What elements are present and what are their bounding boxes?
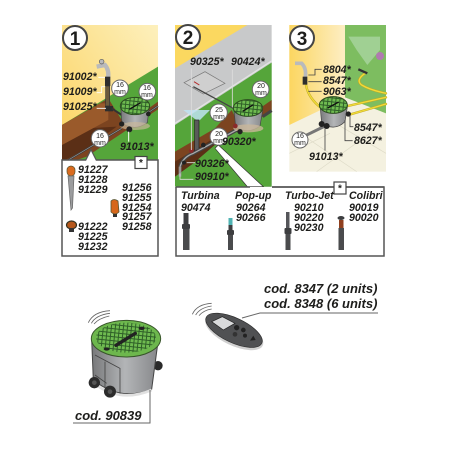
panel 3 codes: 9063* [323,86,352,98]
panel 3: tap and hose installation [289,25,386,172]
accessory codes: 91232 [78,241,108,253]
icon: Turbina sprinkler [182,213,190,250]
leader lines [308,69,353,151]
sprinkler names and codes: 90220 [294,212,324,224]
mm labels: mm [213,114,225,121]
mm labels: mm [255,90,267,97]
accessory codes [78,164,153,253]
mm labels: mm [213,138,225,145]
number badge 1: 1 [70,29,81,50]
icon: wireless signal [192,303,212,316]
panel 1 codes: 91025* [63,101,97,113]
panel 3 illustration [289,25,386,172]
tap [97,65,108,78]
panel 2 illustration [175,25,272,188]
panel 1 accessories box [62,150,158,256]
sprinkler names and codes: Turbina [181,190,220,202]
valve box [121,106,149,127]
accessory codes: 91256 [122,182,152,194]
remote illustration [192,303,268,358]
accessory codes: 91228 [78,174,108,186]
valve box [320,105,348,127]
hoses [306,73,386,115]
panel 3 codes: 8627* [354,135,383,147]
panel 2 codes [190,56,265,183]
sprinkler names and codes: 90264 [236,202,266,214]
asterisk box [334,182,346,194]
panel 1 codes: 91002* [63,71,97,83]
16 mm label: 16 [296,133,304,140]
number badge 2: 2 [183,28,193,49]
panel 3 codes: 8547* [354,122,383,134]
panel 1 codes [63,71,154,153]
panel 2 sprinklers box [176,182,384,256]
accessory codes: 91225 [78,231,109,243]
16 mm labels [94,82,153,147]
asterisk box: * [338,184,342,194]
panel 3 codes: 8804* [323,64,352,76]
icon: Colibri sprinkler [338,216,344,250]
sprinkler names and codes: Pop-up [235,190,272,202]
asterisk box: * [139,158,143,169]
remote control product [192,281,378,358]
valve box illustration [88,311,163,398]
accessory codes: 91254 [122,202,152,214]
sprinkler names and codes: Colibri [349,190,384,202]
number badge 3: 3 [297,29,307,50]
icon: wireless signal [88,311,110,324]
mm labels: 20 [257,83,265,90]
valve box [234,111,263,131]
spray [183,110,210,122]
mm labels: 25 [215,107,223,114]
icon: Turbo-Jet sprinkler [284,212,292,250]
panel 2 codes: 90910* [195,171,229,183]
16 mm labels: 16 [143,85,151,92]
leader line [242,313,378,318]
sprinkler names and codes: 90019 [349,202,379,214]
icon: Pop-up sprinkler [227,218,234,250]
16 mm labels: mm [141,92,153,99]
panel 3 codes: 8547* [323,75,352,87]
accessory codes: 91258 [122,221,152,233]
sprinkler names and codes: Turbo-Jet [285,190,334,202]
sprinkler names and codes: 90266 [236,212,266,224]
number badge 3 [290,26,314,50]
size bubbles [112,80,128,97]
icon: spike dripper [67,166,75,210]
accessory codes: 91255 [122,192,153,204]
sprinkler names and codes: 90210 [294,202,324,214]
panel 2 codes: 90424* [231,56,265,68]
accessory codes: 91229 [78,184,108,196]
panel 2 codes: 90326* [195,158,229,170]
panel 2 codes: 90325* [190,56,224,68]
paved box [184,72,225,94]
code 90839: cod. 90839 [75,408,142,423]
panel 1 illustration [62,25,158,165]
panel 3 codes: 91013* [309,151,343,163]
16 mm labels: 16 [96,133,104,140]
sprinkler names and codes: 90474 [181,202,211,214]
16 mm labels: 16 [116,82,124,89]
icon: orange dripper [111,200,119,217]
mm labels [213,83,267,145]
leader line [73,390,150,423]
16 mm label: mm [294,140,306,147]
panel 1 codes: 91013* [120,141,154,153]
panel 1: garden tap installation [62,25,158,165]
accessory codes: 91227 [78,164,109,176]
remote codes [264,281,377,311]
16 mm labels: mm [114,89,126,96]
16 mm labels: mm [94,140,106,147]
16 mm label [294,133,306,147]
size bubbles [252,81,269,98]
number badge 2 [176,25,200,49]
accessory codes: 91257 [122,211,153,223]
panel 1 codes: 91009* [63,86,97,98]
panel 2: pop-up sprinkler installation [175,25,272,188]
sprinkler names and codes [181,190,384,234]
tap [295,63,306,77]
sprinkler names and codes: 90020 [349,212,379,224]
remote codes: cod. 8347 (2 units) [264,281,377,296]
sprinkler names and codes: 90230 [294,222,324,234]
valve box product [73,311,163,423]
icon: round dripper [66,221,76,232]
pointer [215,145,263,187]
panel 3 codes [309,64,383,163]
panel 2 codes: 90320* [222,136,256,148]
remote codes: cod. 8348 (6 units) [264,296,377,311]
accessory codes: 91222 [78,221,108,233]
mm labels: 20 [215,131,223,138]
